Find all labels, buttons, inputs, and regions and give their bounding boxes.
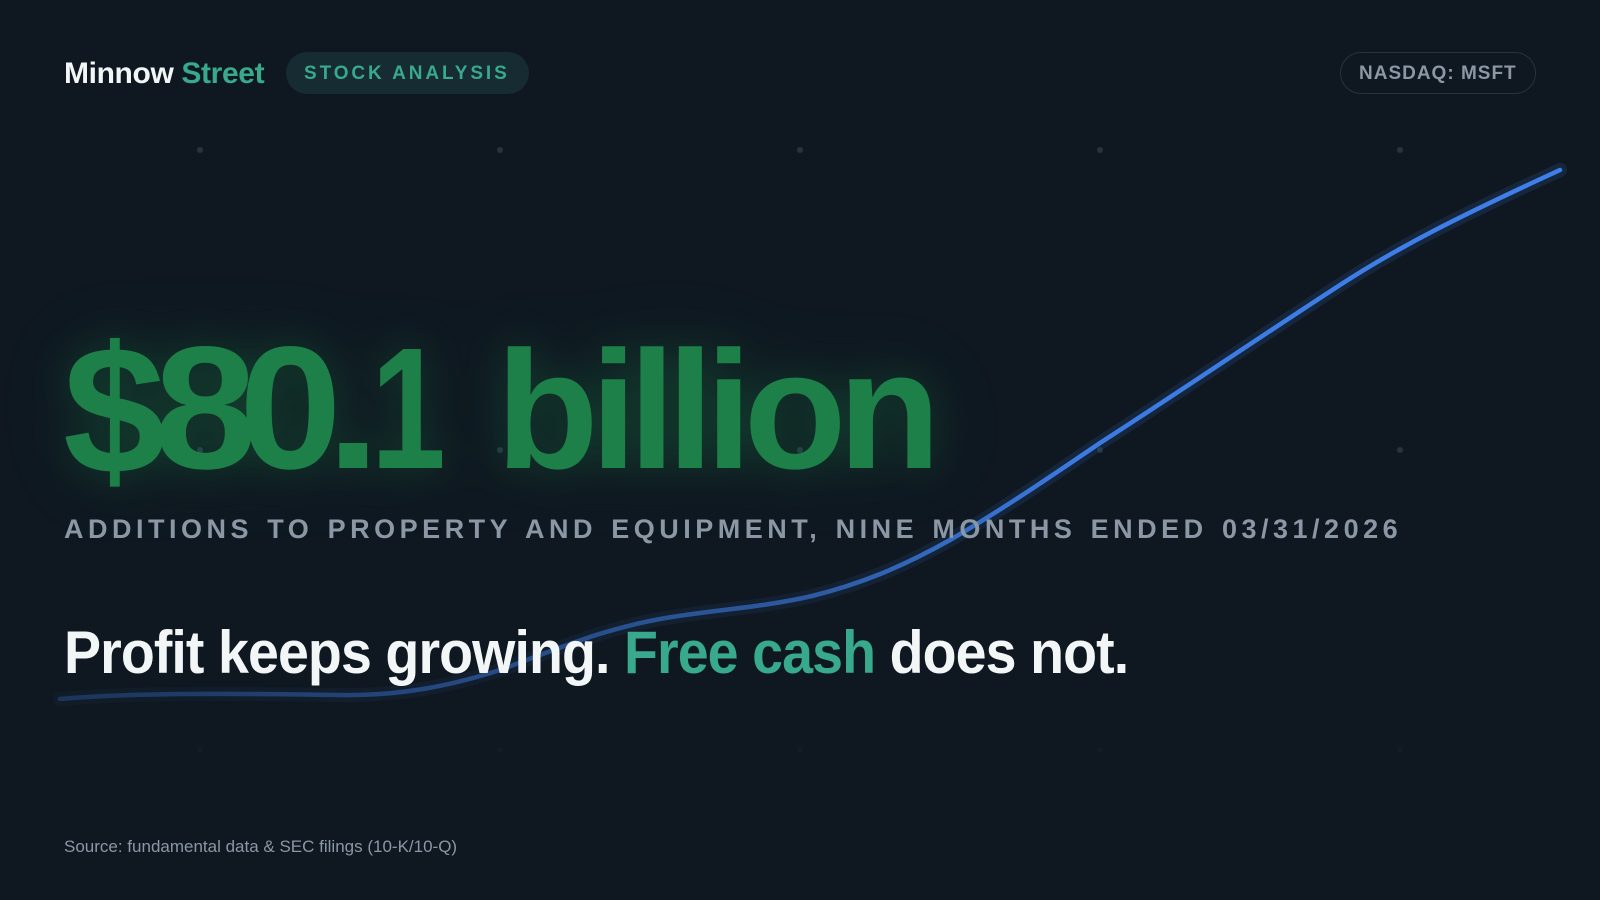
- metric caption: ADDITIONS TO PROPERTY AND EQUIPMENT, NINE MONTHS ENDED 03/31/2026: [64, 514, 1402, 544]
- source note: Source: fundamental data & SEC filings (10-K/10-Q): [64, 837, 457, 856]
- statement: Profit keeps growing. Free cash does not.: [64, 619, 1128, 686]
- badge: ticker: [1340, 52, 1536, 94]
- headline figure: .: [326, 316, 381, 504]
- headline figure: 8: [154, 310, 256, 505]
- brand logo: Minnow Street: [64, 57, 264, 90]
- badge: stock analysis: STOCK ANALYSIS: [304, 63, 510, 84]
- headline figure: $: [62, 308, 165, 512]
- headline figure: [60, 308, 944, 512]
- headline figure: 0: [238, 310, 341, 505]
- headline figure: billion: [496, 316, 932, 504]
- badge: stock analysis: [286, 52, 529, 94]
- badge: ticker: NASDAQ: MSFT: [1359, 63, 1517, 84]
- headline figure: 1: [371, 311, 446, 505]
